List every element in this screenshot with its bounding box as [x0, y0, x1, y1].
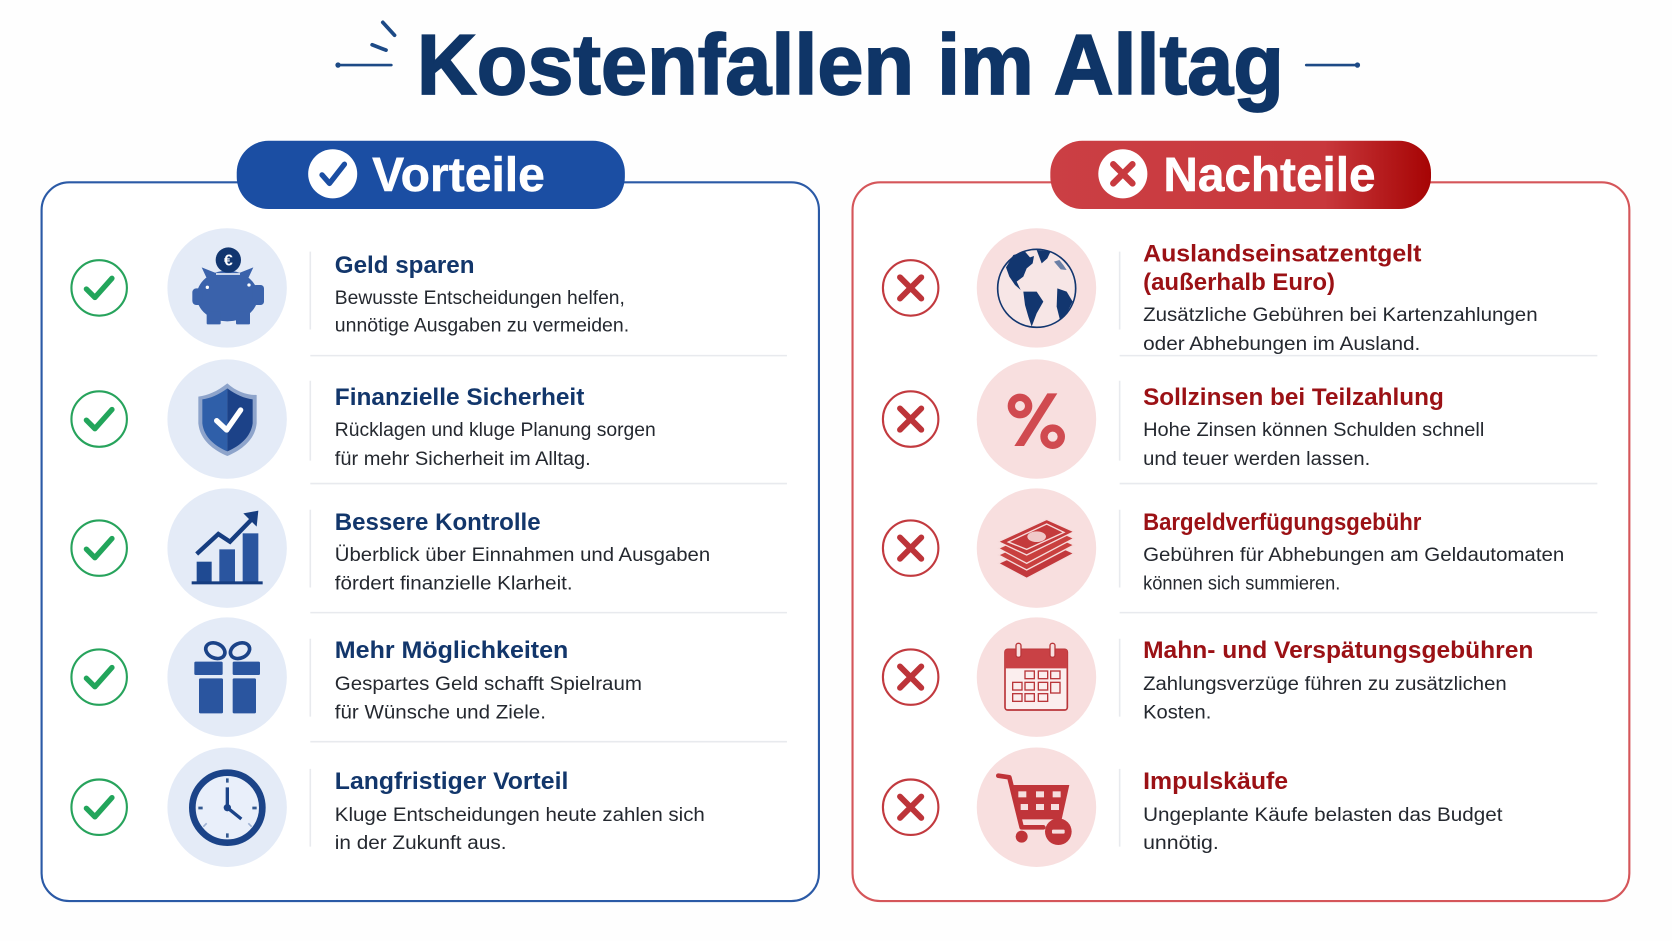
title accent right: [1306, 63, 1360, 67]
status cross 5: [883, 780, 938, 835]
text: Bessere Kontrolle: Bessere Kontrolle: [335, 509, 541, 536]
text: Auslandseinsatzentgelt: Zusätzliche Gebühren bei Kartenzahlungen: [1143, 305, 1538, 326]
status check 1: [71, 260, 127, 316]
icon: bar chart: [167, 488, 287, 608]
text: Bessere Kontrolle: [335, 509, 710, 595]
panel border: Vorteile: [42, 182, 819, 901]
icon: calendar: [977, 617, 1096, 737]
header: Nachteile: [1050, 141, 1431, 209]
icon: percent: [977, 359, 1096, 479]
text: Mehr Möglichkeiten: [335, 637, 642, 724]
text: Mahn- und Verspätungsgebühren: Mahn- und Verspätungsgebühren: [1143, 637, 1533, 664]
text: Auslandseinsatzentgelt: Auslandseinsatzentgelt: [1143, 240, 1421, 267]
text: Geld sparen: Geld sparen: [335, 252, 475, 279]
text: Bargeldverfügungsgebühr: können sich summieren.: [1143, 574, 1340, 595]
text: Impulskäufe: [1143, 768, 1503, 854]
text: Finanzielle Sicherheit: Rücklagen und kluge Planung sorgen: [335, 420, 656, 441]
text: Bargeldverfügungsgebühr: Bargeldverfügungsgebühr: [1143, 509, 1421, 536]
icon: gift: [167, 617, 287, 737]
icon: money stack: [977, 488, 1096, 608]
text: Langfristiger Vorteil: Kluge Entscheidungen heute zahlen sich: [335, 805, 705, 826]
panel: Vorteile: [42, 141, 819, 901]
text: Finanzielle Sicherheit: Finanzielle Sicherheit: [335, 384, 584, 411]
text: Bargeldverfügungsgebühr: [1143, 509, 1564, 595]
text: Mehr Möglichkeiten: für Wünsche und Ziele.: [335, 703, 546, 724]
icon: clock: [167, 748, 287, 867]
status cross 3: [883, 520, 938, 576]
text: Impulskäufe: Impulskäufe: [1143, 768, 1288, 795]
status cross 1: [883, 260, 938, 316]
text: Langfristiger Vorteil: [335, 768, 705, 854]
icon: piggy bank: €: [224, 253, 233, 270]
text: Finanzielle Sicherheit: [335, 384, 656, 470]
status cross 4: [883, 649, 938, 705]
text: Impulskäufe: Ungeplante Käufe belasten das Budget: [1143, 805, 1503, 826]
text: Mahn- und Verspätungsgebühren: [1143, 637, 1533, 724]
icon: shopping cart: [977, 748, 1096, 867]
icon: globe: [977, 228, 1096, 348]
text: Geld sparen: unnötige Ausgaben zu vermeiden.: [335, 316, 629, 337]
icon: piggy bank: [167, 228, 287, 348]
icon: shield: [167, 359, 287, 479]
text: Bargeldverfügungsgebühr: Gebühren für Abhebungen am Geldautomaten: [1143, 545, 1564, 566]
text: Langfristiger Vorteil: in der Zukunft aus.: [335, 833, 507, 854]
text: Auslandseinsatzentgelt: [1143, 240, 1538, 355]
header: Nachteile: Nachteile: [1163, 149, 1376, 202]
status check 4: [71, 649, 127, 705]
header: Vorteile: Vorteile: [372, 149, 545, 202]
text: Sollzinsen bei Teilzahlung: und teuer werden lassen.: [1143, 449, 1370, 470]
text: Finanzielle Sicherheit: für mehr Sicherheit im Alltag.: [335, 449, 591, 470]
text: Sollzinsen bei Teilzahlung: [1143, 384, 1484, 470]
panel border: Nachteile: [853, 182, 1629, 901]
text: Geld sparen: [335, 252, 629, 337]
header: Vorteile: [237, 141, 625, 209]
text: Mehr Möglichkeiten: Mehr Möglichkeiten: [335, 637, 568, 664]
status cross 2: [883, 391, 938, 447]
status check 2: [71, 391, 127, 447]
text: Langfristiger Vorteil: Langfristiger Vorteil: [335, 768, 568, 795]
title accent left: [336, 22, 395, 67]
text: Geld sparen: Bewusste Entscheidungen helfen,: [335, 288, 625, 309]
title: Kostenfallen im Alltag: [417, 18, 1284, 113]
text: Mehr Möglichkeiten: Gespartes Geld schafft Spielraum: [335, 674, 642, 695]
status check 3: [71, 520, 127, 576]
text: Bessere Kontrolle: Überblick über Einnahmen und Ausgaben: [335, 545, 710, 566]
text: Impulskäufe: unnötig.: [1143, 833, 1219, 854]
text: Bessere Kontrolle: fördert finanzielle Klarheit.: [335, 574, 573, 595]
panel: Nachteile: [853, 141, 1629, 901]
status check 5: [71, 780, 127, 835]
text: Mahn- und Verspätungsgebühren: Kosten.: [1143, 703, 1211, 724]
text: Auslandseinsatzentgelt: (außerhalb Euro): [1143, 269, 1335, 296]
text: Sollzinsen bei Teilzahlung: Sollzinsen bei Teilzahlung: [1143, 384, 1444, 411]
text: Mahn- und Verspätungsgebühren: Zahlungsverzüge führen zu zusätzlichen: [1143, 674, 1507, 695]
text: Auslandseinsatzentgelt: oder Abhebungen im Ausland.: [1143, 334, 1420, 355]
text: Sollzinsen bei Teilzahlung: Hohe Zinsen können Schulden schnell: [1143, 420, 1484, 441]
